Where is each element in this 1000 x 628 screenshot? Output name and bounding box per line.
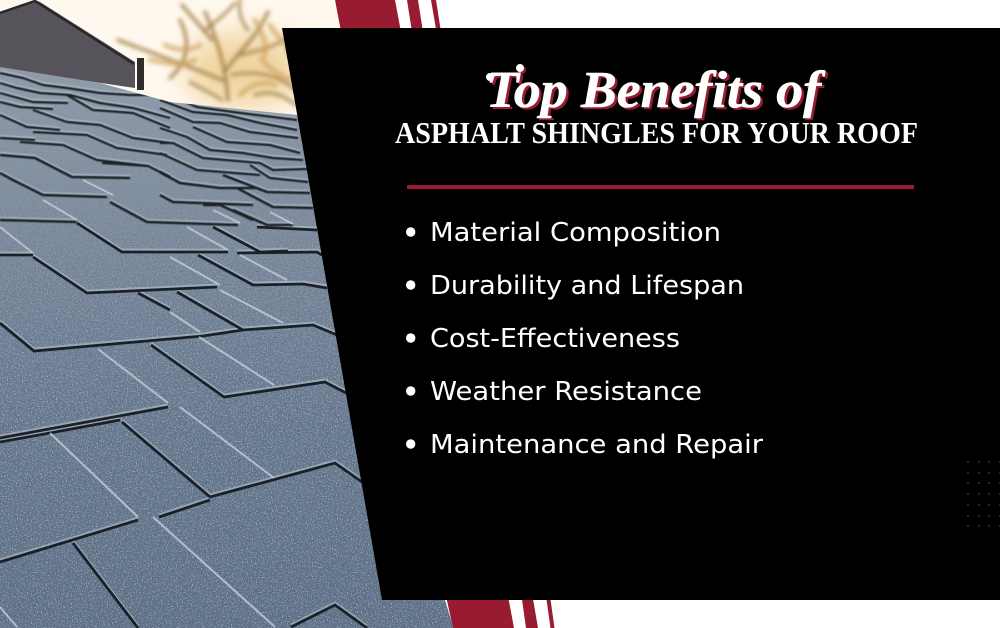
sky <box>0 0 340 115</box>
photo: asphalt shingle roof at sunrise <box>0 0 460 628</box>
black content panel <box>282 28 1000 600</box>
bare tree <box>118 0 295 105</box>
item: cost-effectiveness: Cost-Effectiveness <box>430 324 680 354</box>
light shingle cut lines <box>0 180 293 627</box>
decorative dot grid <box>967 461 1000 527</box>
warm glow behind tree <box>185 32 305 108</box>
house roof edge <box>0 1 134 64</box>
title line 1: Top Benefits of <box>486 62 826 119</box>
item: maintenance and repair: Maintenance and Repair <box>430 430 763 460</box>
title <box>395 62 918 150</box>
title line 1 shadow: Top Benefits of <box>488 64 828 121</box>
house gable <box>0 0 135 88</box>
shingle edge highlights <box>0 71 367 626</box>
shingle grain texture <box>0 60 460 628</box>
roof base <box>0 67 454 628</box>
rooftop post <box>137 58 144 90</box>
item: material composition: Material Composition <box>430 218 721 248</box>
red divider rule <box>407 185 914 189</box>
shingle shadow lines <box>0 73 367 628</box>
top red diagonal stripes <box>335 0 441 32</box>
item: durability and lifespan: Durability and Lifespan <box>430 271 744 301</box>
bottom red diagonal stripes <box>446 596 554 628</box>
item: weather resistance: Weather Resistance <box>430 377 702 407</box>
title line 2: ASPHALT SHINGLES FOR YOUR ROOF <box>395 115 918 150</box>
bullet list <box>406 218 763 460</box>
